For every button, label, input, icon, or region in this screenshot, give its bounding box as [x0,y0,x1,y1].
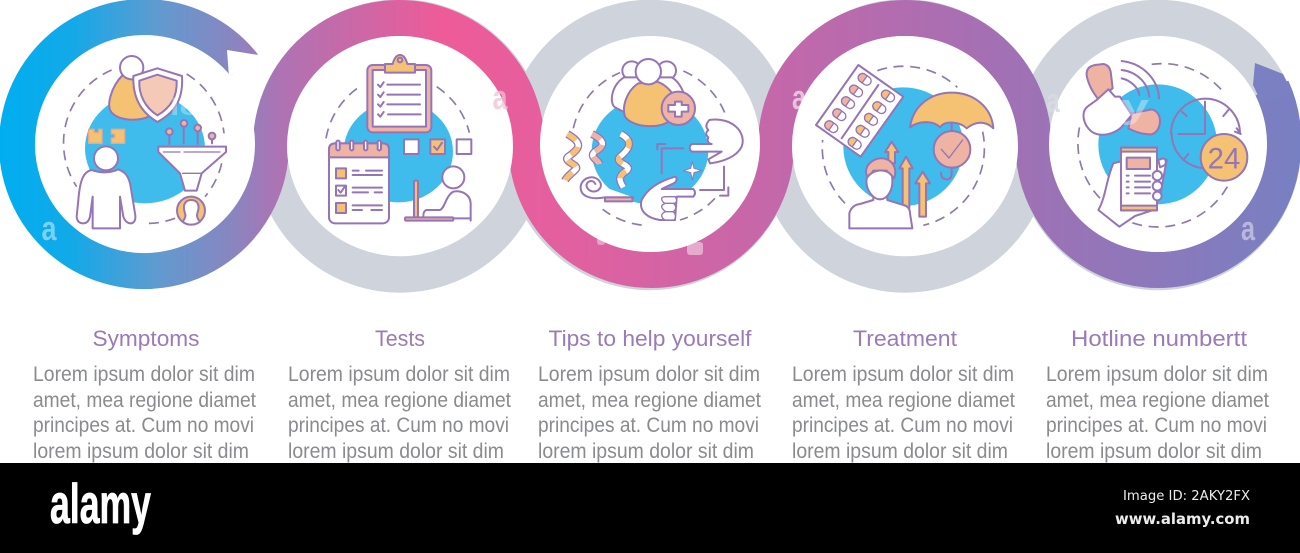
column: tips to help yourself: Lorem ipsum dolor sit dim [538,363,760,386]
icon: treatment [816,65,993,228]
footer bar [0,463,1300,553]
column: symptoms: principes at. Cum no movi [33,414,254,437]
column: symptoms: Symptoms [92,326,200,351]
watermark fragments: a [792,79,807,117]
column: tests: principes at. Cum no movi [288,414,509,437]
column: symptoms: lorem ipsum dolor sit dim [33,440,249,463]
column: tips to help yourself: Tips to help yourself [548,326,752,351]
icon: hotline number [1078,61,1247,227]
watermark fragments: a [1046,82,1060,120]
column: symptoms [33,326,256,463]
icon: symptoms [64,56,226,228]
column: tests: Lorem ipsum dolor sit dim [288,363,510,386]
column: hotline number: Lorem ipsum dolor sit dim [1046,363,1268,386]
watermark fragments: a [492,79,508,117]
footer logo: alamy [50,472,151,535]
watermark fragments: a [42,210,57,248]
column: tests: Tests [375,326,425,351]
watermark fragments [42,79,1256,255]
column: tips to help yourself: lorem ipsum dolor sit dim [538,440,754,463]
icon: tests [326,55,471,223]
column: hotline number: lorem ipsum dolor sit dim [1046,440,1262,463]
watermark fragments: a [1241,210,1256,248]
column: symptoms: amet, mea regione diamet [33,389,256,412]
column: treatment: amet, mea regione diamet [792,389,1015,412]
column: tips to help yourself: amet, mea regione diamet [538,389,761,412]
column: treatment [792,326,1015,463]
column: tests: amet, mea regione diamet [288,389,511,412]
column: treatment: lorem ipsum dolor sit dim [792,440,1008,463]
inner white discs [37,36,1267,256]
column: hotline number: principes at. Cum no movi [1046,414,1267,437]
column: tips to help yourself [538,326,761,463]
icon: tips to help yourself [565,59,743,225]
column: treatment: Treatment [853,326,957,351]
column: hotline number: amet, mea regione diamet [1046,389,1269,412]
column: hotline number: Hotline numbertt [1071,326,1247,351]
column: symptoms: Lorem ipsum dolor sit dim [33,363,255,386]
column: hotline number [1046,326,1269,463]
grey rings [272,18,1283,274]
watermark fragments: y [1121,88,1149,126]
gradient wave ribbon with arrow head [17,17,1292,271]
column: tips to help yourself: principes at. Cum no movi [538,414,759,437]
column: treatment: principes at. Cum no movi [792,414,1013,437]
column: tests: lorem ipsum dolor sit dim [288,440,504,463]
column: tests [288,326,511,463]
icon: hotline number: 24 [1208,142,1240,175]
footer image id: Image ID: 2AKY2FX [1123,488,1250,504]
column: treatment: Lorem ipsum dolor sit dim [792,363,1014,386]
footer url: www.alamy.com [1115,510,1250,528]
watermark fragments: lo [170,94,200,121]
